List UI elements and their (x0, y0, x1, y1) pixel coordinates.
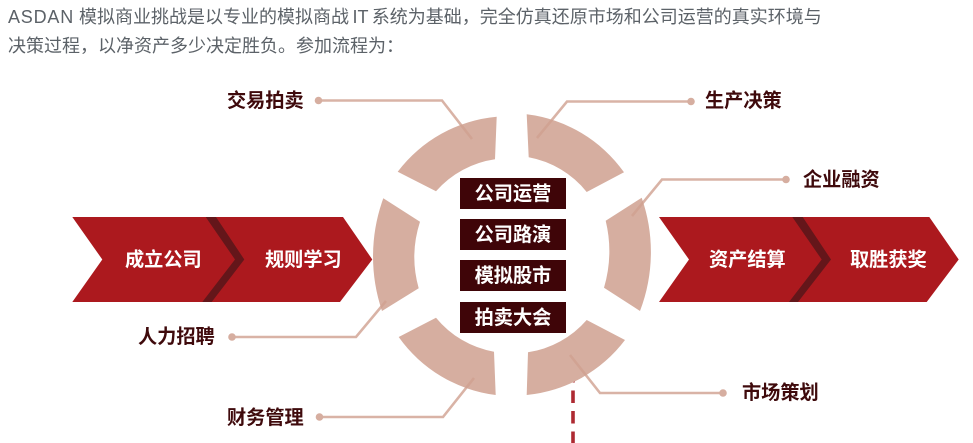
intro text: ASDAN 模拟商业挑战是以专业的模拟商战 IT 系统为基础，完全仿真还原市场和公司运营的真实环境与 (8, 7, 822, 27)
right chevron: settlement and award (659, 217, 959, 302)
ring segment: right (604, 198, 651, 311)
callout: hiring (138, 301, 386, 348)
intro text (8, 7, 822, 56)
dashed connector (571, 378, 575, 443)
callout: corporate financing: 企业融资 (803, 168, 880, 191)
ring segment: left (373, 198, 420, 311)
center box: auction: 拍卖大会 (475, 307, 551, 329)
callout: financial management (227, 378, 474, 429)
center box: auction (460, 302, 566, 333)
right chevron: settlement and award: 取胜获奖 (850, 249, 927, 271)
center box: company roadshow (460, 219, 566, 250)
callout: trading auction (227, 89, 472, 139)
callout: financial management: 财务管理 (227, 406, 304, 429)
left chevron: found company and learn rules (72, 217, 372, 302)
callout: market planning (570, 355, 819, 404)
ring segment: bottom right (527, 320, 625, 395)
callout: trading auction: 交易拍卖 (227, 89, 304, 112)
center box: company roadshow: 公司路演 (475, 224, 551, 246)
callout: hiring: 人力招聘 (138, 326, 215, 348)
ring segment: bottom left (399, 318, 496, 395)
center box: company operation (460, 178, 566, 209)
ring segment: top left (398, 117, 497, 191)
callout: market planning: 市场策划 (742, 381, 819, 404)
callout: production decision (537, 90, 782, 138)
ring of six segments (373, 114, 651, 395)
center box: simulated stock market (460, 260, 566, 291)
right chevron: settlement and award: 资产结算 (709, 248, 786, 271)
left chevron: found company and learn rules: 成立公司 (125, 248, 202, 271)
callout: production decision: 生产决策 (705, 90, 782, 112)
callout: corporate financing (632, 168, 880, 216)
center box: company operation: 公司运营 (475, 183, 551, 205)
intro text: 决策过程，以净资产多少决定胜负。参加流程为： (8, 36, 404, 56)
center box: simulated stock market: 模拟股市 (475, 264, 551, 287)
left chevron: found company and learn rules: 规则学习 (265, 248, 342, 271)
ring segment: top right (527, 114, 624, 192)
